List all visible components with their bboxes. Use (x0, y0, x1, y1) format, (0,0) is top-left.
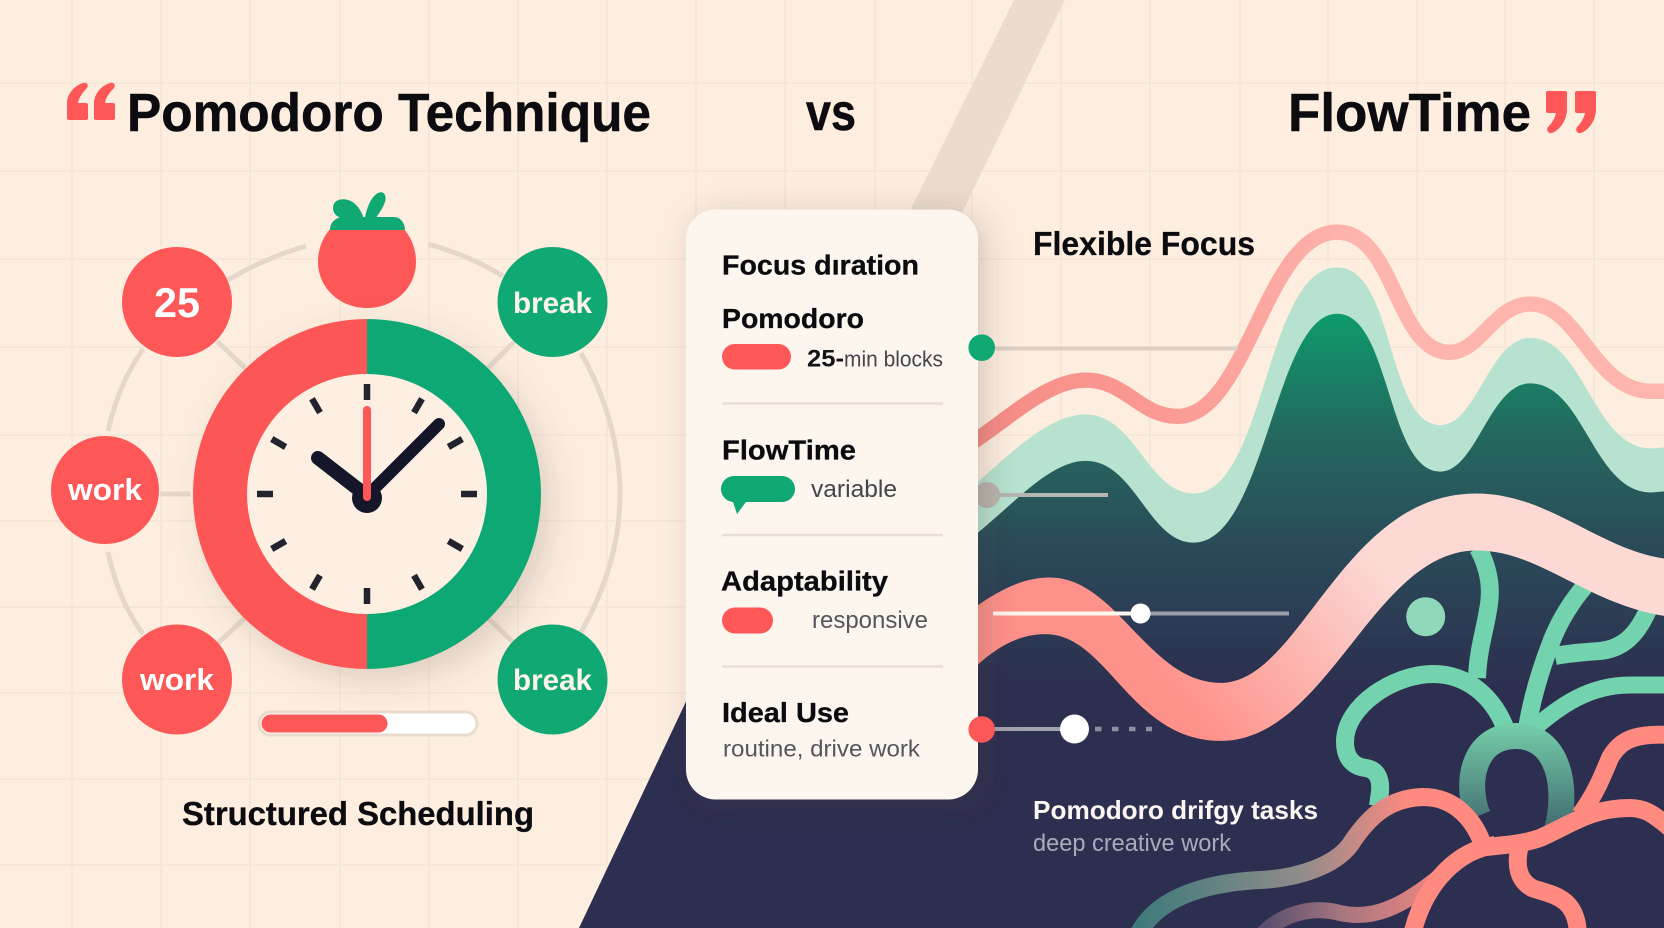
row: Ideal Use: routine, drive work (723, 736, 921, 762)
title: FlowTime: FlowTime (1288, 83, 1531, 143)
icon: closing quote mark (1546, 91, 1596, 133)
icon: opening quote mark (67, 83, 115, 120)
row: Pomodoro: min blocks (844, 346, 943, 372)
title: vs: vs (806, 84, 856, 142)
step: work left (51, 436, 159, 544)
title: Pomodoro Technique: Pomodoro Technique (127, 83, 651, 143)
panel: comparison card (686, 210, 978, 800)
heading: Flexible Focus: Flexible Focus (1033, 225, 1255, 262)
coral branches (1138, 735, 1664, 928)
step: 25: 25 (154, 279, 200, 326)
mint branches (1345, 548, 1664, 830)
marker: red dot (968, 716, 995, 743)
row: Adaptability: responsive (812, 607, 928, 634)
clock hands (318, 410, 439, 513)
row: Adaptability (721, 566, 928, 634)
navy diagonal panel (579, 672, 1664, 928)
salmon ribbon (960, 493, 1664, 741)
text: Pomodoro tasks: Pomodoro drifgy tasks (1033, 795, 1318, 825)
progress bar (259, 712, 477, 735)
step: work left: work (67, 472, 143, 507)
row: FlowTime (721, 434, 897, 514)
row: Ideal Use: Ideal Use (722, 697, 849, 728)
step: break top: break (513, 287, 592, 320)
row: Pomodoro: Pomodoro (722, 303, 864, 334)
clock ticks (257, 384, 477, 604)
step: break top (498, 247, 608, 357)
heading: Focus duration: Focus dıration (722, 250, 919, 280)
step: 25 (122, 247, 232, 357)
panel: Pomodoro cycle diagram (51, 192, 620, 832)
slider: white knob (993, 604, 1289, 624)
step: break bottom (498, 624, 608, 734)
orbit ring and connectors (108, 244, 620, 644)
step: break bottom: break (513, 664, 592, 697)
panel: FlowTime waves (960, 232, 1664, 928)
row: Adaptability: Adaptability (721, 566, 888, 596)
marker: green dot (968, 334, 995, 361)
row: Ideal Use (722, 697, 921, 762)
diagonal divider band (908, 0, 1065, 215)
chart: clock with red and green halves (193, 319, 541, 669)
mint dot (1406, 597, 1445, 636)
mint wave (960, 267, 1664, 928)
caption: Structured Scheduling: Structured Scheduling (182, 795, 534, 832)
icon: tomato (318, 192, 416, 308)
row: Pomodoro (722, 303, 943, 372)
row: FlowTime: variable (811, 476, 897, 503)
thin coral wave (960, 232, 1664, 451)
step: work bottom: work (139, 662, 215, 697)
text: deep creative work: deep creative work (1033, 830, 1232, 857)
slider: ideal use connector (995, 714, 1152, 744)
callout line: pomodoro connector (995, 346, 1238, 350)
step: work bottom (122, 624, 232, 734)
row: Pomodoro: 25- (807, 346, 844, 372)
dark gradient wave (960, 314, 1664, 928)
row: FlowTime: FlowTime (722, 434, 856, 466)
callout line: grey connector (974, 482, 1108, 508)
